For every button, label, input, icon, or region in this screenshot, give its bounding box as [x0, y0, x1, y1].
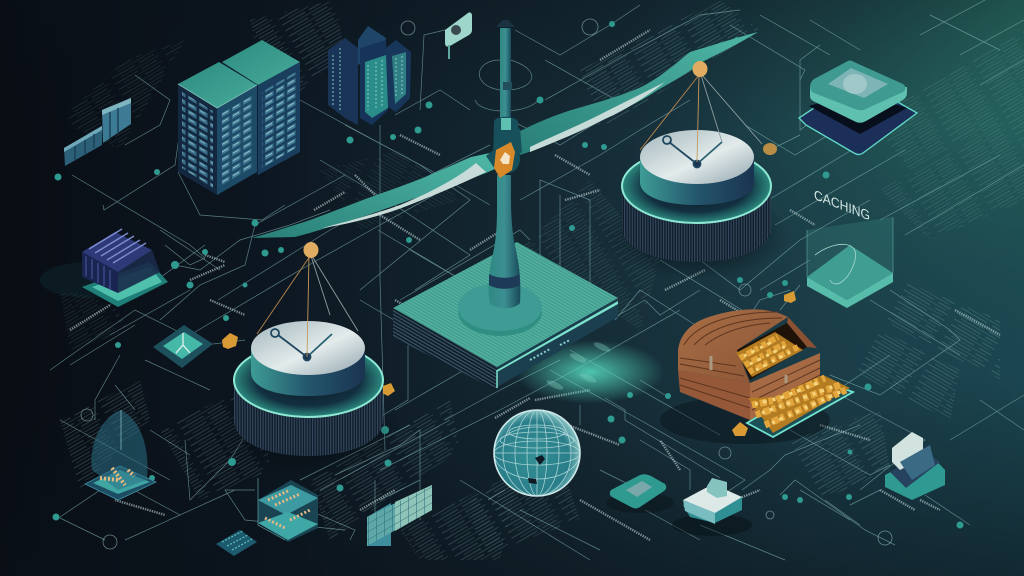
- icon: server racks: [178, 40, 300, 195]
- chest lid: [678, 309, 817, 383]
- shadow: [216, 384, 400, 476]
- icon: small bar panels top left: [64, 98, 131, 166]
- pan side: [251, 348, 365, 396]
- hanger strings: [257, 256, 358, 357]
- gold nugget near chest: [784, 291, 796, 303]
- icon: small server towers: [328, 26, 411, 125]
- icon: small tag top center: [445, 12, 472, 59]
- chest box: [678, 353, 820, 420]
- icon: orange hexagon badge: [494, 142, 515, 178]
- clock hands: [663, 136, 722, 168]
- small round outline icons: [81, 19, 892, 549]
- gold pile inside: [736, 332, 803, 377]
- icon: glass cube: [807, 217, 893, 308]
- icon: pale grid panel: [367, 485, 432, 546]
- icon: teal diamond tray: [153, 325, 213, 368]
- front panel of platform: [497, 304, 618, 392]
- clock hands: [271, 329, 332, 360]
- glowing ring: [234, 343, 383, 417]
- icon: wire globe: [494, 410, 580, 496]
- shadow: [605, 191, 789, 279]
- icon: top-right stacked device: [799, 60, 917, 154]
- glowing ring: [622, 149, 771, 223]
- icon: dome over data tray: [85, 410, 156, 500]
- scale pole and base disc: [458, 20, 542, 336]
- icon: small blue grid tile: [216, 530, 257, 556]
- icon: white keycap device: [672, 478, 752, 536]
- hanger caps: [304, 61, 708, 258]
- pan top: [640, 130, 754, 184]
- base platform: [393, 242, 618, 390]
- gold nugget left: [222, 333, 395, 396]
- icon: small data cube: [258, 478, 318, 542]
- chest latches: [711, 356, 786, 383]
- icon: rounded teal chip: [606, 474, 674, 513]
- left rack: [178, 62, 257, 195]
- dark cylinder: [622, 186, 771, 262]
- scale left pan assembly: [216, 256, 400, 476]
- icon: right stacked device: [885, 432, 945, 500]
- icon: heat sink server: [40, 229, 168, 307]
- right rack: [222, 40, 300, 175]
- pan side: [640, 157, 754, 205]
- hub: [493, 117, 520, 174]
- scale beam: [252, 32, 758, 238]
- scale right pan assembly: [605, 75, 789, 279]
- chest opening: [737, 323, 807, 380]
- gold coin: [763, 143, 777, 155]
- dark cylinder: [234, 382, 383, 456]
- pan top: [251, 321, 365, 375]
- caching label: CACHING: [814, 186, 870, 223]
- gold spill: [748, 375, 850, 433]
- glowing pad: [747, 380, 853, 437]
- platform glow: [515, 340, 665, 404]
- icon: treasure chest: [660, 309, 853, 444]
- connection nodes: [52, 21, 964, 528]
- hanger strings: [640, 75, 762, 162]
